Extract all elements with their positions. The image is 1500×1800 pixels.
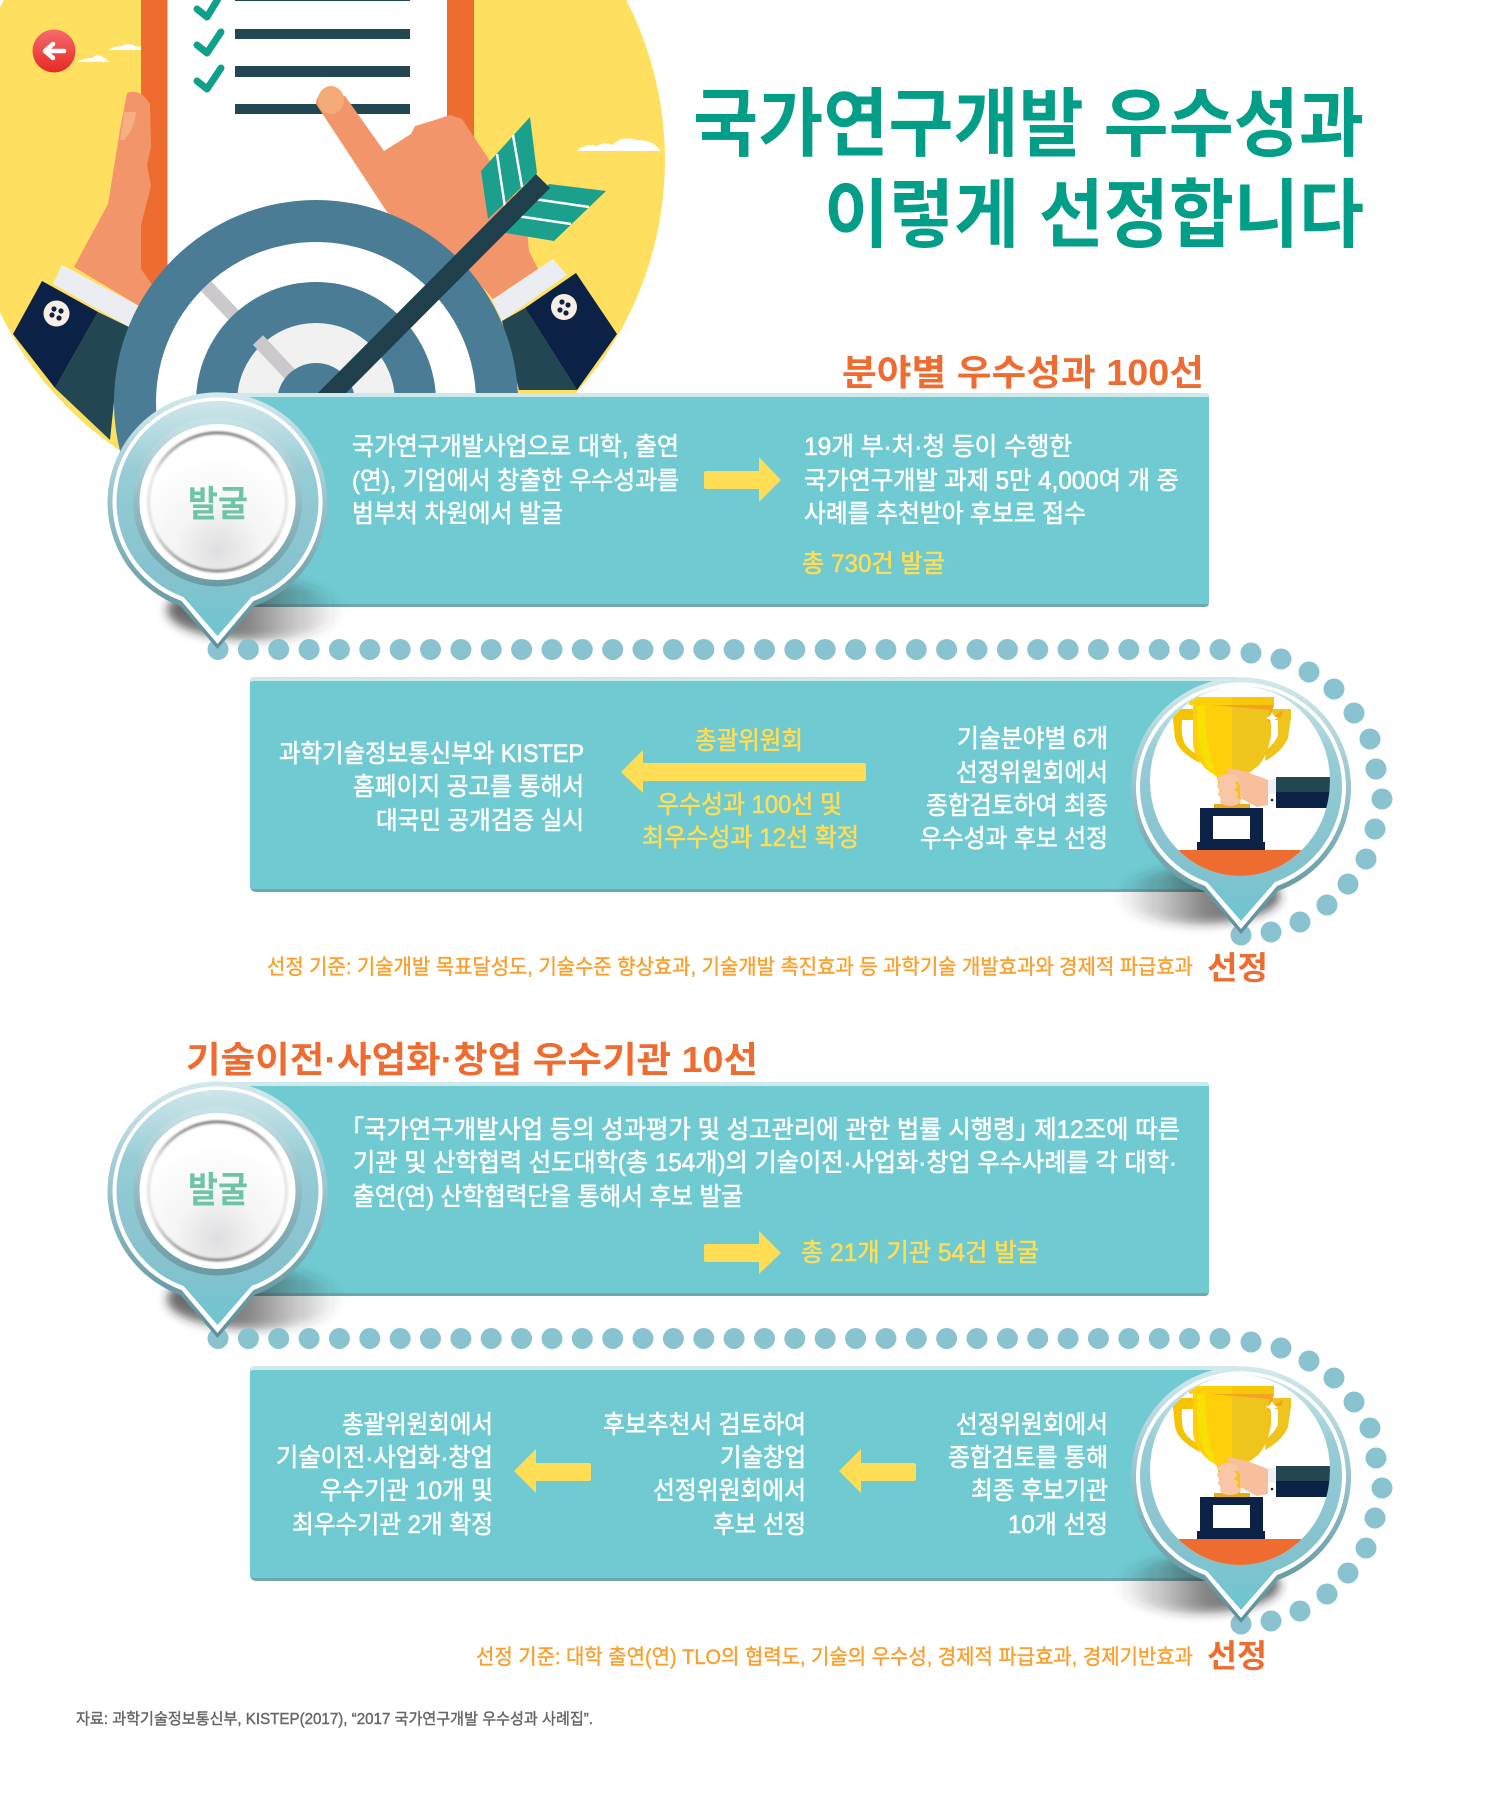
text: review step: 후보추천서 검토하여 xyxy=(603,1411,806,1439)
panel: discovery section 1 xyxy=(217,393,1209,607)
arrow: right xyxy=(704,1231,781,1274)
text: confirmed: 우수성과 100선 및 xyxy=(657,791,842,819)
text: six committees: 기술분야별 6개 xyxy=(957,725,1108,753)
text: selection step: 종합검토를 통해 xyxy=(948,1444,1108,1472)
text: selection step xyxy=(948,1411,1108,1539)
heading: section 1: 분야별 우수성과 100선 xyxy=(842,352,1204,393)
text: discovery right: 국가연구개발 과제 5만 4,000여 개 중 xyxy=(804,467,1179,495)
text: selection criteria 2: 선정 기준: 대학 출연(연) TLO의 협력도, 기술의 우수성, 경제적 파급효과, 경제기반효과 xyxy=(476,1646,1193,1669)
label: selected 2: 선정 xyxy=(1207,1638,1267,1674)
text: confirmed: 최우수성과 12선 확정 xyxy=(642,824,859,852)
icon: trophy xyxy=(1172,697,1330,876)
text: discovery left: 국가연구개발사업으로 대학, 출연 xyxy=(352,433,679,461)
pin: discovery 2 xyxy=(108,1081,328,1338)
text: general committee: 총괄위원회 xyxy=(695,727,803,755)
text: selection step: 최종 후보기관 xyxy=(971,1477,1108,1505)
text: discovery detail: 출연(연) 산학협력단을 통해서 후보 발굴 xyxy=(353,1183,743,1211)
text: total 730: 총 730건 발굴 xyxy=(802,550,945,578)
text: review step: 선정위원회에서 xyxy=(653,1477,806,1505)
arrow: left 1 xyxy=(514,1449,591,1493)
text: six committees: 선정위원회에서 xyxy=(956,759,1108,787)
dotted path 2 xyxy=(208,1328,1392,1634)
text: selection step: 10개 선정 xyxy=(1008,1511,1108,1539)
text: general committee step: 우수기관 10개 및 xyxy=(320,1477,493,1505)
text: public verification xyxy=(279,740,584,835)
text: review step xyxy=(603,1411,806,1539)
back button xyxy=(32,30,76,72)
right hand xyxy=(316,93,538,299)
text: public verification: 홈페이지 공고를 통해서 xyxy=(353,773,584,801)
dotted path 1 xyxy=(208,639,1392,946)
panel: selection section 1 xyxy=(250,677,1240,892)
left sleeve xyxy=(55,312,129,440)
text: discovery right xyxy=(804,433,1179,528)
text: discovery left xyxy=(352,433,679,528)
text: discovery detail: 기관 및 산학협력 선도대학(총 154개)의 기술이전·사업화·창업 우수사례를 각 대학· xyxy=(353,1149,1177,1177)
text: selection criteria 1: 선정 기준: 기술개발 목표달성도, 기술수준 향상효과, 기술개발 촉진효과 등 과학기술 개발효과와 경제적 파급효과 xyxy=(267,956,1193,979)
icon: trophy xyxy=(1172,1386,1330,1565)
text: six committees: 종합검토하여 최종 xyxy=(926,792,1108,820)
title: 이렇게 선정합니다 xyxy=(824,173,1364,257)
pin shadow 1 xyxy=(167,580,343,640)
checklist clipboard xyxy=(141,0,474,284)
label: discovery: 발굴 xyxy=(188,1169,248,1210)
text: review step: 후보 선정 xyxy=(713,1511,806,1539)
yellow sun circle xyxy=(0,0,665,510)
arrow: left long xyxy=(621,750,866,793)
text: general committee step: 총괄위원회에서 xyxy=(342,1411,493,1439)
pin: discovery 1 xyxy=(108,392,328,649)
arrow in target xyxy=(325,117,606,400)
illustration: hands, checklist, target and arrow xyxy=(0,0,665,452)
text: discovery left: 범부처 차원에서 발굴 xyxy=(352,500,563,528)
left hand xyxy=(74,92,153,306)
title xyxy=(693,82,1364,257)
text: public verification: 과학기술정보통신부와 KISTEP xyxy=(279,740,584,768)
text: general committee step: 최우수기관 2개 확정 xyxy=(292,1511,493,1539)
source note: 자료: 과학기술정보통신부, KISTEP(2017), “2017 국가연구개발 우수성과 사례집”. xyxy=(76,1710,593,1728)
heading: section 2: 기술이전·사업화·창업 우수기관 10선 xyxy=(186,1039,758,1080)
title: 국가연구개발 우수성과 xyxy=(693,82,1364,166)
clipped artwork xyxy=(13,0,617,440)
panel: discovery section 2 xyxy=(217,1082,1209,1296)
text: confirmed xyxy=(642,791,859,852)
label: selected 1: 선정 xyxy=(1207,950,1268,986)
text: discovery right: 19개 부·처·청 등이 수행한 xyxy=(804,433,1072,461)
text: general committee step xyxy=(276,1411,493,1539)
text: general committee step: 기술이전·사업화·창업 xyxy=(276,1444,493,1472)
pin shadow 3 xyxy=(167,1269,343,1329)
text: review step: 기술창업 xyxy=(720,1444,806,1472)
target xyxy=(114,200,518,604)
text: total 21: 총 21개 기관 54건 발굴 xyxy=(801,1239,1039,1267)
text: six committees: 우수성과 후보 선정 xyxy=(920,825,1108,853)
text: public verification: 대국민 공개검증 실시 xyxy=(376,807,584,835)
arrow: right xyxy=(704,457,781,502)
text: discovery detail: 「국가연구개발사업 등의 성과평가 및 성고관리에 관한 법률 시행령」 제12조에 따른 xyxy=(352,1116,1180,1144)
text: selection step: 선정위원회에서 xyxy=(956,1411,1108,1439)
pin: trophy 2 xyxy=(1131,1366,1351,1623)
text: discovery left: (연), 기업에서 창출한 우수성과를 xyxy=(352,467,679,495)
panel: selection section 2 xyxy=(250,1366,1240,1581)
label: discovery: 발굴 xyxy=(188,483,248,524)
pin shadow 2 xyxy=(1116,868,1280,924)
clouds xyxy=(77,44,661,151)
pin shadow 4 xyxy=(1116,1557,1280,1613)
text: six committees xyxy=(920,725,1108,853)
text: discovery detail xyxy=(352,1116,1180,1211)
right sleeve xyxy=(502,308,577,390)
text: discovery right: 사례를 추천받아 후보로 접수 xyxy=(804,500,1086,528)
arrow: left 2 xyxy=(839,1449,916,1493)
pin: trophy 1 xyxy=(1131,677,1351,934)
